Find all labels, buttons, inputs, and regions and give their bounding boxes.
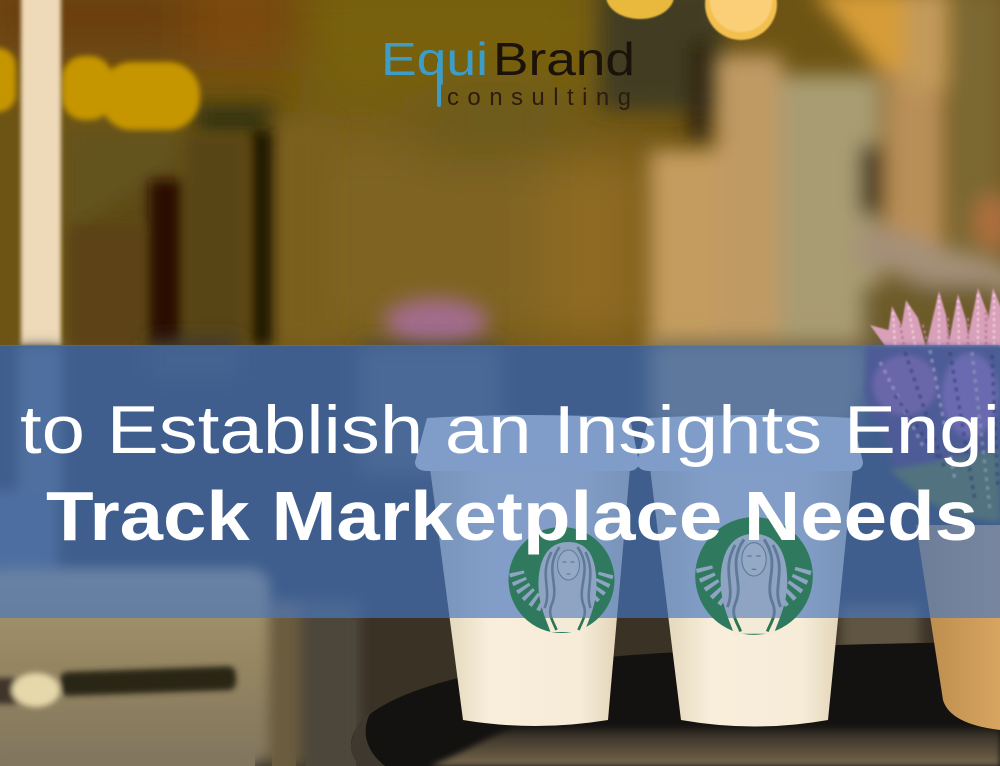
blue title band: [0, 345, 1000, 618]
right coffee cup: [637, 415, 863, 726]
left coffee cup: [415, 415, 639, 726]
white pillar: [21, 0, 61, 346]
heading line two: Track Marketplace Needs: [46, 477, 978, 555]
logo word consulting: consulting: [447, 84, 631, 111]
plant pot: [916, 525, 1000, 730]
lavender plant leaves seen through band: [864, 346, 1000, 522]
logo descender stroke: [437, 62, 441, 107]
golden bokeh lights left: [0, 48, 200, 130]
logo: EquiBrand consulting: [385, 42, 632, 110]
scene behind title band: [0, 330, 927, 570]
heading line one: to Establish an Insights Engi: [20, 392, 1000, 468]
ceiling lights: [606, 0, 777, 40]
logo word Equi: Equi: [381, 33, 488, 85]
blurred cafe photo background: [0, 0, 1000, 350]
icon: siren logo right cup: [695, 517, 813, 635]
lavender plant blossoms: [870, 288, 1000, 347]
round black table: [351, 642, 1000, 766]
icon: siren logo left cup: [508, 527, 614, 633]
lower background: counter, dark area: [0, 568, 1000, 766]
logo word Brand: Brand: [493, 33, 635, 85]
